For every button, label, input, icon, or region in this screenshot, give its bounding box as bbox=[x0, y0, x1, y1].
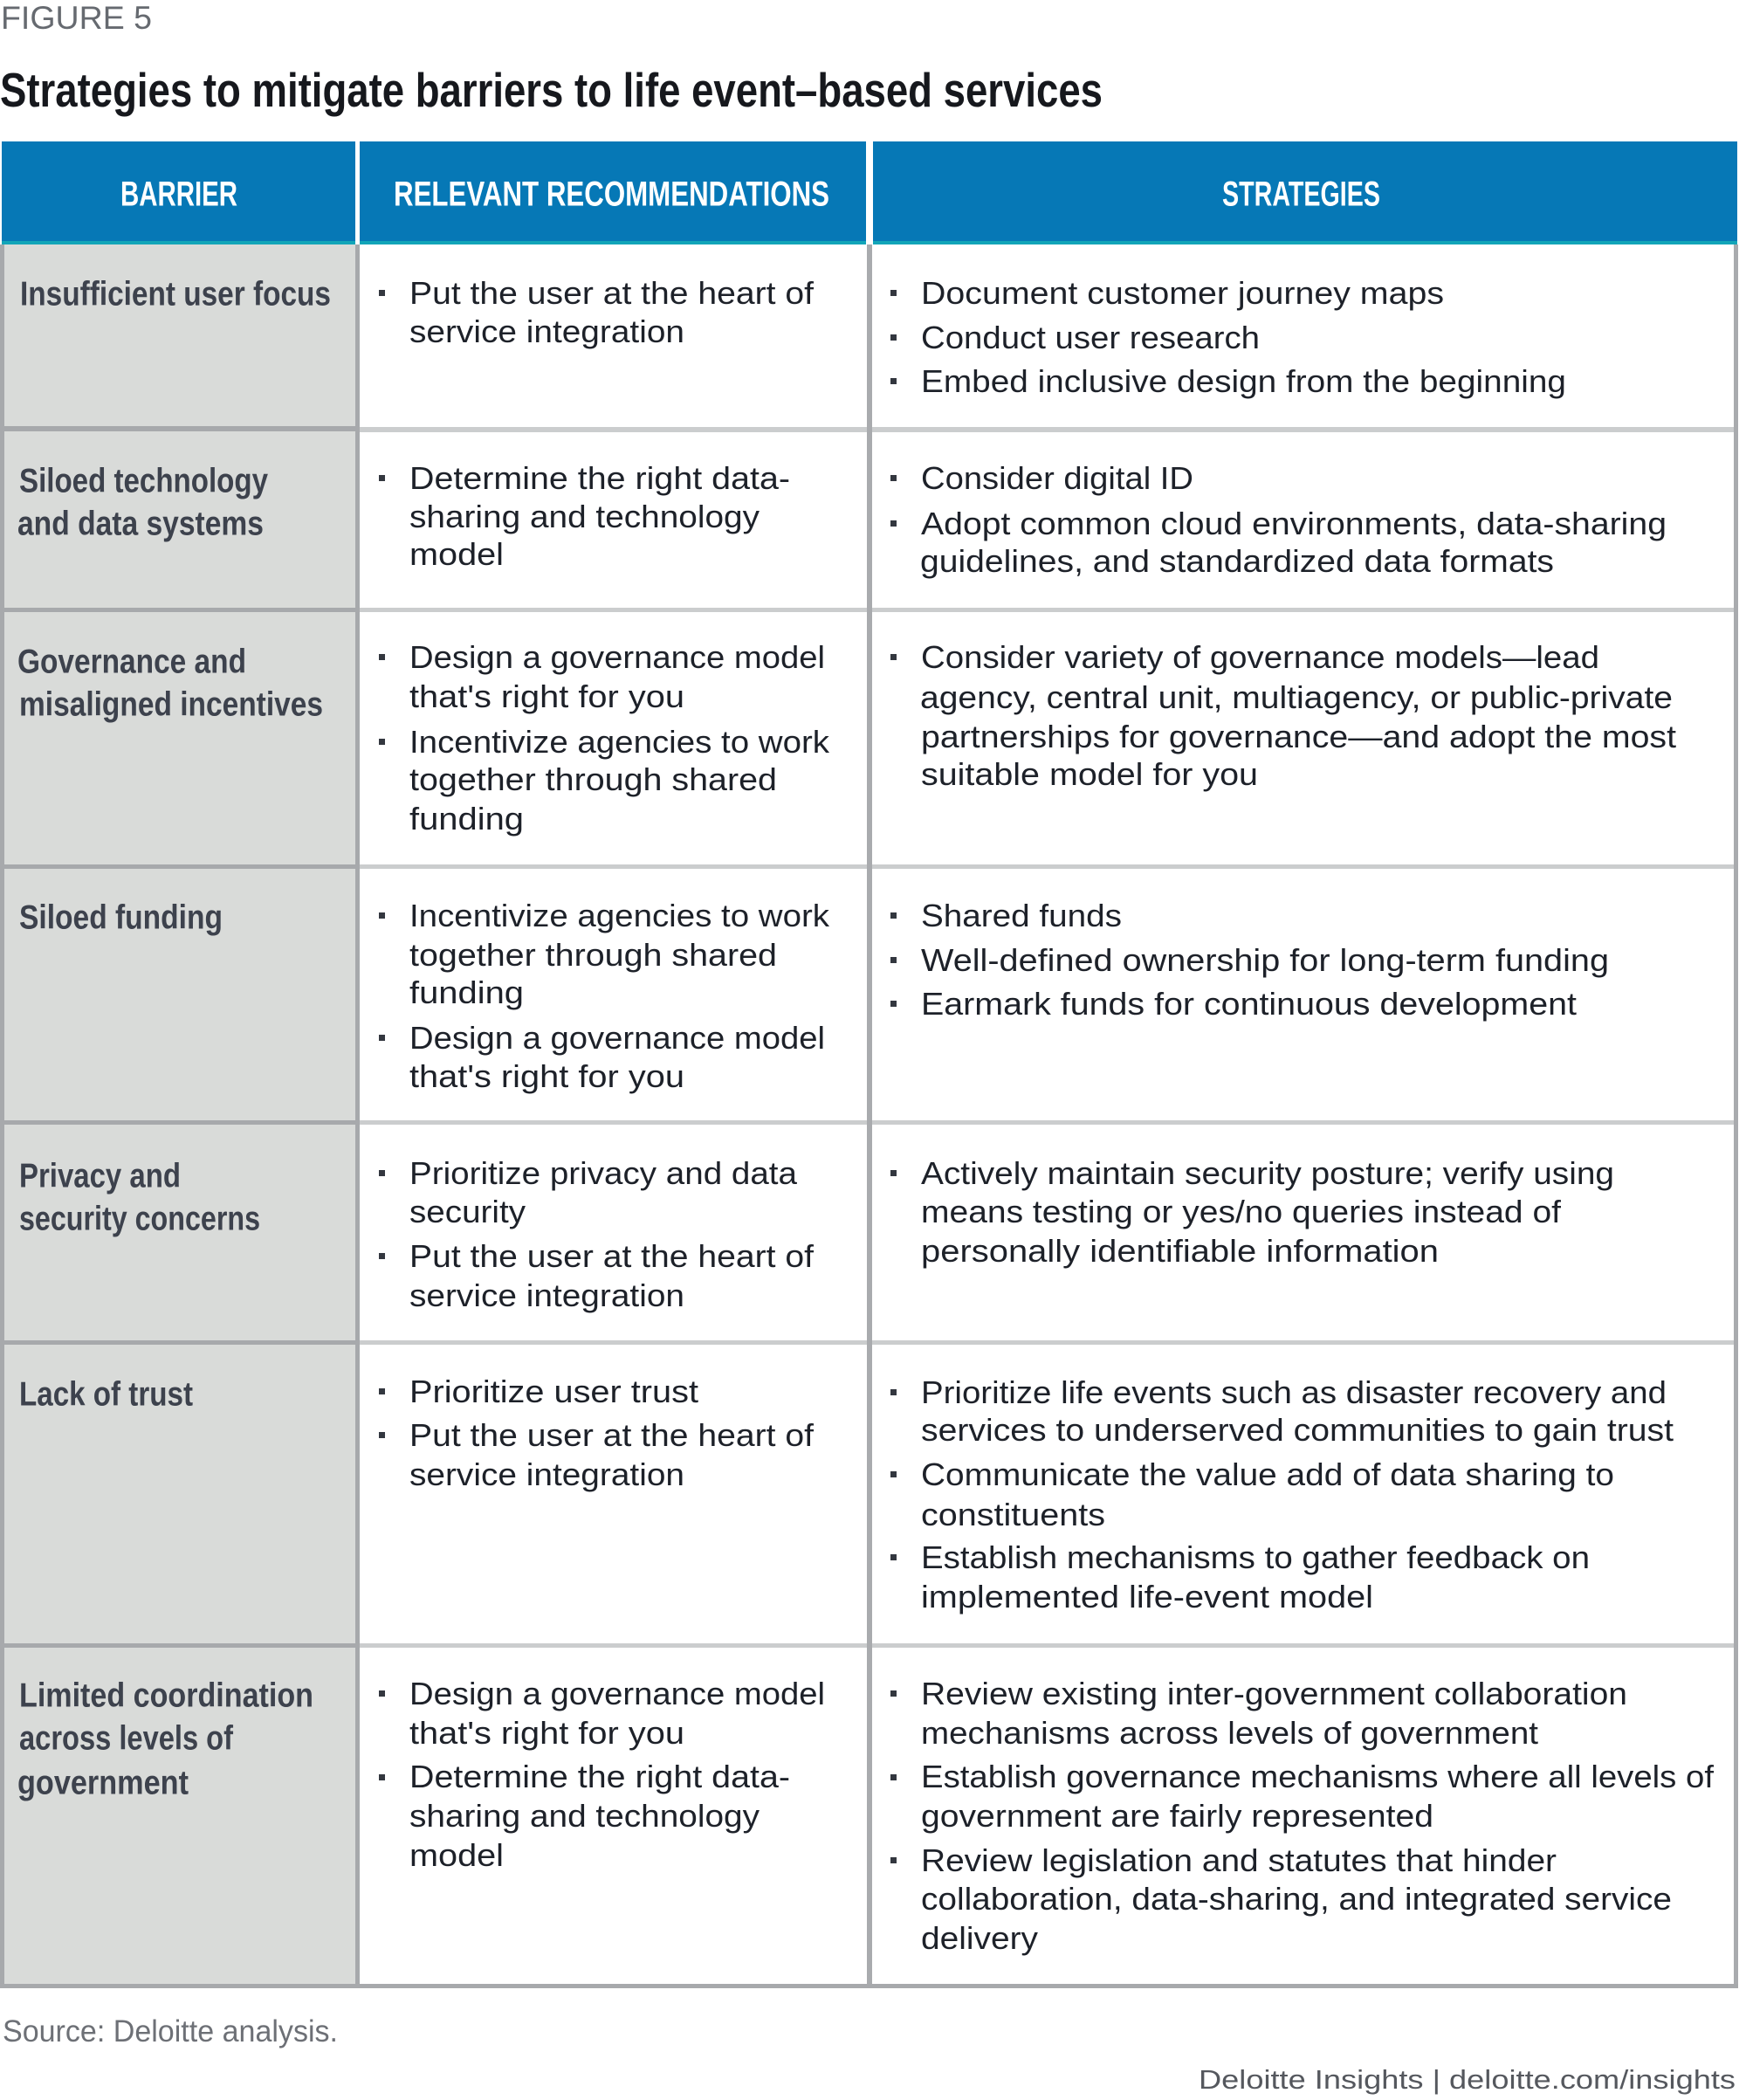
row: limited coordination across levels of government: collaboration, data-sharing, and integrated service bbox=[921, 1881, 1672, 1917]
row: limited coordination across levels of government bbox=[17, 1676, 1715, 1956]
row: lack of trust: Communicate the value add of data sharing to bbox=[921, 1456, 1614, 1492]
row: lack of trust: Establish mechanisms to gather feedback on bbox=[921, 1539, 1590, 1575]
row: siloed funding: Incentivize agencies to work bbox=[409, 898, 830, 933]
row: insufficient user focus: Insufficient user focus bbox=[20, 276, 331, 313]
row: limited coordination across levels of government: mechanisms across levels of government bbox=[921, 1715, 1538, 1751]
row: siloed technology and data systems: model bbox=[409, 536, 504, 572]
figure label: FIGURE 5 bbox=[1, 0, 152, 36]
row: insufficient user focus: Put the user at the heart of bbox=[409, 275, 815, 311]
row: limited coordination across levels of government: sharing and technology bbox=[409, 1798, 760, 1834]
row: siloed technology and data systems: sharing and technology bbox=[409, 499, 760, 534]
row: insufficient user focus: service integration bbox=[409, 313, 684, 349]
row: privacy and security concerns: service integration bbox=[409, 1277, 684, 1313]
row: privacy and security concerns: Actively maintain security posture; verify using bbox=[921, 1155, 1614, 1191]
row: privacy and security concerns: Prioritize privacy and data bbox=[409, 1155, 798, 1191]
row: privacy and security concerns: security concerns bbox=[19, 1200, 260, 1238]
row: limited coordination across levels of government: Limited coordination bbox=[19, 1677, 313, 1715]
row: siloed technology and data systems: Siloed technology bbox=[19, 463, 268, 499]
row: governance and misaligned incentives: together through shared bbox=[409, 761, 777, 797]
row: siloed technology and data systems: guidelines, and standardized data formats bbox=[920, 543, 1554, 579]
row: governance and misaligned incentives: that's right for you bbox=[409, 678, 684, 714]
row: limited coordination across levels of government: Review existing inter-government collaboration bbox=[921, 1676, 1627, 1711]
row: siloed funding: that's right for you bbox=[409, 1058, 684, 1094]
row: privacy and security concerns bbox=[19, 1155, 1614, 1313]
row: limited coordination across levels of government: delivery bbox=[921, 1920, 1038, 1956]
title: Strategies to mitigate barriers to life event–based services bbox=[0, 63, 1103, 117]
row: siloed funding: Earmark funds for continuous development bbox=[921, 986, 1577, 1022]
row: siloed funding: Well-defined ownership for long-term funding bbox=[921, 942, 1609, 978]
row: siloed funding: funding bbox=[409, 974, 524, 1010]
row: privacy and security concerns: Privacy and bbox=[19, 1158, 181, 1195]
row: lack of trust: services to underserved communities to gain trust bbox=[921, 1412, 1674, 1448]
row: limited coordination across levels of government: government are fairly represented bbox=[921, 1798, 1433, 1834]
row: governance and misaligned incentives: partnerships for governance—and adopt the most bbox=[921, 719, 1676, 754]
row: insufficient user focus: Embed inclusive design from the beginning bbox=[921, 363, 1566, 399]
row: lack of trust bbox=[19, 1374, 1674, 1615]
row: limited coordination across levels of government: Establish governance mechanisms where all levels of bbox=[921, 1759, 1715, 1794]
row: insufficient user focus: Conduct user research bbox=[921, 320, 1260, 355]
row: siloed funding: Siloed funding bbox=[19, 899, 223, 936]
row: limited coordination across levels of government: Determine the right data- bbox=[409, 1759, 790, 1794]
row: lack of trust: Lack of trust bbox=[19, 1376, 193, 1413]
row: governance and misaligned incentives: suitable model for you bbox=[921, 756, 1258, 792]
row: lack of trust: Prioritize user trust bbox=[409, 1374, 698, 1409]
credit line: Deloitte Insights | deloitte.com/insights bbox=[1199, 2064, 1736, 2095]
header row: STRATEGIES bbox=[1222, 175, 1380, 213]
row: siloed technology and data systems: Determine the right data- bbox=[409, 460, 790, 496]
row: siloed technology and data systems bbox=[17, 460, 1667, 579]
row: siloed technology and data systems: Adopt common cloud environments, data-sharing bbox=[921, 506, 1667, 541]
row: privacy and security concerns: Put the user at the heart of bbox=[409, 1238, 815, 1274]
row: lack of trust: Prioritize life events such as disaster recovery and bbox=[921, 1374, 1667, 1410]
row: limited coordination across levels of government: government bbox=[17, 1764, 189, 1802]
row: lack of trust: service integration bbox=[409, 1456, 684, 1492]
row: limited coordination across levels of government: that's right for you bbox=[409, 1715, 684, 1751]
row: lack of trust: implemented life-event model bbox=[921, 1579, 1373, 1615]
row: privacy and security concerns: means testing or yes/no queries instead of bbox=[921, 1194, 1562, 1229]
row: governance and misaligned incentives: Governance and bbox=[17, 643, 246, 681]
row: lack of trust: constituents bbox=[921, 1497, 1105, 1532]
row: governance and misaligned incentives: misaligned incentives bbox=[19, 686, 323, 723]
row: limited coordination across levels of government: Review legislation and statutes that hinder bbox=[921, 1842, 1557, 1878]
row: governance and misaligned incentives: funding bbox=[409, 801, 524, 837]
row: lack of trust: Put the user at the heart of bbox=[409, 1417, 815, 1453]
row: governance and misaligned incentives: Design a governance model bbox=[409, 639, 825, 675]
row: governance and misaligned incentives bbox=[17, 639, 1676, 837]
row: siloed technology and data systems: Consider digital ID bbox=[921, 460, 1193, 496]
row: siloed funding: Design a governance model bbox=[409, 1020, 825, 1056]
header row: RELEVANT RECOMMENDATIONS bbox=[394, 175, 829, 213]
row: privacy and security concerns: personally identifiable information bbox=[921, 1233, 1439, 1269]
row: limited coordination across levels of government: model bbox=[409, 1837, 504, 1873]
row: limited coordination across levels of government: across levels of bbox=[19, 1720, 234, 1757]
row: insufficient user focus bbox=[20, 275, 1566, 399]
header row: BARRIER bbox=[120, 175, 237, 213]
row: insufficient user focus: Document customer journey maps bbox=[921, 275, 1444, 311]
source note: Source: Deloitte analysis. bbox=[3, 2014, 338, 2048]
row: siloed technology and data systems: and data systems bbox=[17, 505, 264, 543]
row: siloed funding: Shared funds bbox=[921, 898, 1122, 933]
row: limited coordination across levels of government: Design a governance model bbox=[409, 1676, 825, 1711]
row: siloed funding bbox=[19, 898, 1609, 1094]
row: privacy and security concerns: security bbox=[409, 1194, 526, 1229]
row: governance and misaligned incentives: Consider variety of governance models—lead bbox=[921, 639, 1599, 675]
row: governance and misaligned incentives: Incentivize agencies to work bbox=[409, 724, 830, 760]
row: governance and misaligned incentives: agency, central unit, multiagency, or public-private bbox=[920, 679, 1673, 715]
header row bbox=[2, 141, 1737, 244]
row: siloed funding: together through shared bbox=[409, 937, 777, 973]
